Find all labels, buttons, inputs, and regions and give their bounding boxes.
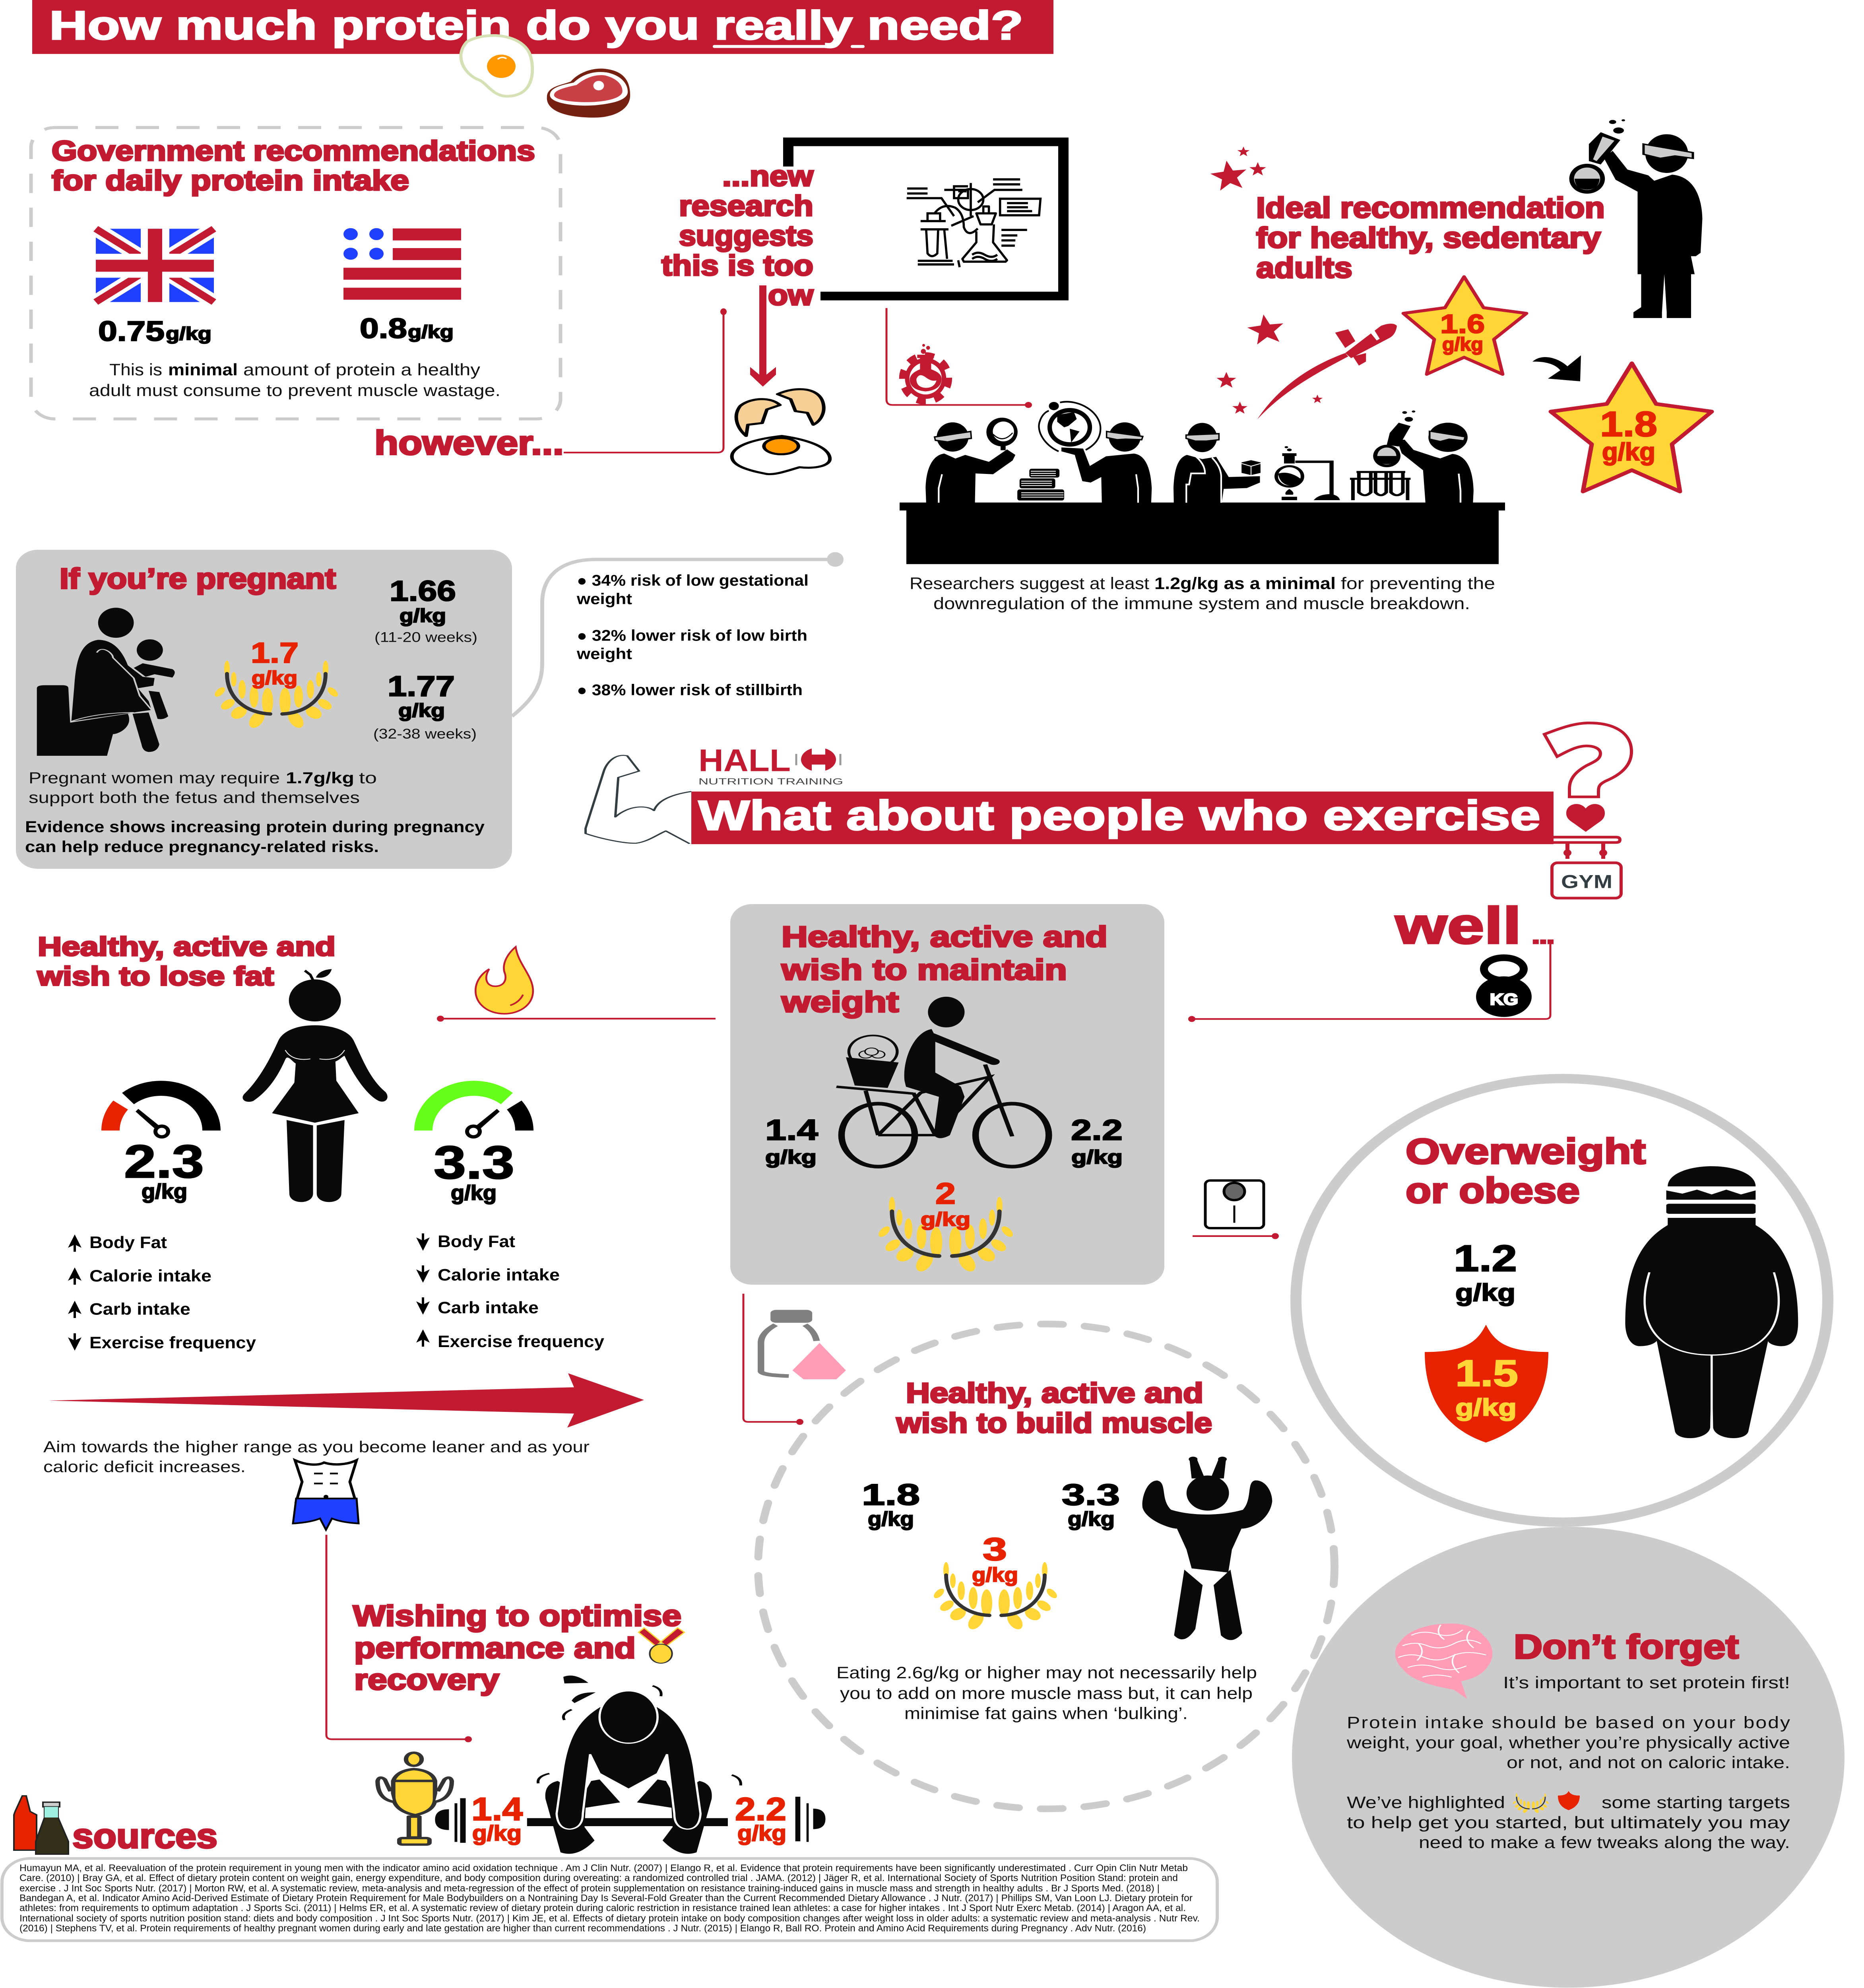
arrow: big red leaner direction (49, 1373, 644, 1427)
USA value: g/kg (408, 322, 454, 342)
heading: build muscle: Healthy, active and (906, 1378, 1203, 1409)
value: 2 g/kg with laurel: 2 (935, 1177, 956, 1210)
value: 1.4 g/kg (765, 1114, 818, 1168)
heading: build muscle (896, 1378, 1212, 1439)
heading: maintain weight: Healthy, active and (782, 921, 1108, 953)
panel: government recommendations (31, 128, 561, 419)
gauge: 2.3 g/kg: 2.3 (124, 1136, 204, 1188)
panel: pregnancy (16, 550, 512, 869)
icon: flask on stand (1276, 446, 1340, 500)
heading: government recommendations: for daily protein intake (52, 165, 409, 196)
heading: build muscle: wish to build muscle (896, 1408, 1212, 1439)
value: 1.4 g/kg: 1.4 (765, 1114, 818, 1146)
connector: however to egg (564, 309, 727, 452)
icon: burger-headed obese figure (1625, 1166, 1798, 1438)
text block: references: Care. (2010) | Bray GA, et al. Effect of dietary protein content on weight gain, energy expenditure, and body composition during overeating: a randomized controlled trial . JAMA. (2012) | Jäger R, et al. International Society of Sports Nutrition Position Stand: protein and (19, 1872, 1178, 1883)
research frame (788, 142, 1063, 296)
value: 1.77 g/kg (373, 670, 477, 742)
panel: build muscle (758, 1324, 1334, 1809)
text block: highlighted targets: to help get you started, but ultimately you may (1347, 1813, 1790, 1832)
list: high range effects: Exercise frequency (438, 1332, 604, 1351)
logo: Hall Nutrition Training: HALL (698, 744, 791, 778)
shield: 1.5 g/kg (1425, 1325, 1548, 1442)
value: 3 g/kg with laurel (932, 1531, 1059, 1631)
text block: references (19, 1862, 1200, 1934)
text block: minimal amount (89, 360, 500, 400)
icon: test tubes (1350, 472, 1410, 500)
value: 1.7 g/kg with laurel: g/kg (252, 667, 297, 688)
connector: research to scientists (886, 308, 1032, 408)
value: 1.4 g/kg performance: g/kg (472, 1821, 522, 1845)
value: 1.2 g/kg: 1.2 (1454, 1237, 1517, 1279)
list: high range effects: Carb intake (438, 1298, 539, 1317)
text block: pregnancy risk bullets: weight (576, 645, 632, 662)
star: 1.6 g/kg: g/kg (1442, 334, 1483, 355)
list: high range effects: Body Fat (438, 1232, 515, 1251)
text block: minimal amount: amount of protein a healthy (243, 360, 480, 379)
text block: researchers suggest: for preventing the (1341, 574, 1495, 593)
text block: highlighted targets (1347, 1791, 1790, 1852)
text block: protein intake: or not, and not on caloric intake. (1507, 1753, 1790, 1772)
list: high range effects: Calorie intake (438, 1265, 560, 1284)
icon: protein tub and powder (761, 1310, 846, 1379)
heading: new research (661, 160, 813, 311)
icon: gym sign: GYM (1561, 871, 1612, 892)
text block: eating 2.6g/kg: minimise fat gains when ‘bulking’. (904, 1704, 1188, 1722)
value: 1.7 g/kg with laurel (213, 637, 340, 730)
value: 1.2 g/kg: g/kg (1455, 1279, 1515, 1306)
UK value: 0.75 (98, 316, 165, 347)
icon: UK flag (96, 229, 214, 302)
heading: new research: suggests (679, 219, 813, 252)
gauge: 3.3 g/kg: g/kg (451, 1181, 497, 1204)
value: 1.66 g/kg: 1.66 (390, 575, 456, 607)
value: 1.7 g/kg with laurel: 1.7 (251, 637, 299, 669)
value: 3 g/kg with laurel: 3 (983, 1531, 1007, 1567)
icon: weightlifter with barbell (435, 1675, 825, 1854)
panel: maintain weight (730, 904, 1164, 1285)
value: 1.66 g/kg: (11-20 weeks) (374, 630, 477, 645)
UK value (98, 316, 211, 347)
lab bench (900, 503, 1505, 564)
list: low range effects: Calorie intake (89, 1266, 211, 1285)
value: 2.2 g/kg: 2.2 (1071, 1114, 1123, 1146)
heading: overweight or obese (1406, 1131, 1646, 1211)
heading: government recommendations (52, 136, 535, 196)
heading: new research: ...new (722, 160, 813, 192)
text block: references: International society of sports nutrition position stand: diets and body composition . J Int Soc Sports Nutr. (2017) | Kim JE, et al. Effects of dietary protein intake on body composition changes after weight loss in older adults: a systematic review and meta-analysis . Nutr Rev. (19, 1913, 1200, 1924)
connector: pregnancy benefits bracket (512, 552, 844, 716)
heading: wishing to optimise (353, 1600, 681, 1696)
icon: gear flask (903, 344, 948, 401)
icon: cracked egg (732, 389, 830, 474)
gauge: 2.3 g/kg (101, 1081, 221, 1203)
value: 2.2 g/kg performance (735, 1791, 786, 1845)
value: 2.2 g/kg performance: g/kg (737, 1821, 786, 1845)
icon: apple-headed woman (242, 969, 388, 1202)
value: 3 g/kg with laurel: g/kg (972, 1564, 1018, 1586)
value: 1.66 g/kg: g/kg (400, 605, 446, 626)
shield: 1.5 g/kg: g/kg (1455, 1394, 1517, 1421)
text block: evidence (25, 818, 485, 856)
icon: bathroom scale (1205, 1180, 1264, 1228)
panel: overweight or obese (1296, 1079, 1828, 1522)
value: 3.3 g/kg (1062, 1478, 1120, 1530)
text block: pregnancy risk bullets: ● 34% risk of low gestational (577, 572, 809, 589)
text block: highlighted targets: some starting targets (1602, 1793, 1790, 1812)
text block: eating 2.6g/kg: you to add on more muscle mass but, it can help (840, 1684, 1253, 1703)
text block: references: (2016) | Stephens TV, et al. Protein requirements of healthy pregnant women during early and late gestation are higher than current recommendations . J Nutr. (2015) | Elango R, Ball RO. Protein and Amino Acid Requirements during Pregnancy . Adv Nutr. (2016) (19, 1923, 1146, 1934)
value: 2 g/kg with laurel: g/kg (921, 1209, 970, 1230)
arrow: curved black (1532, 355, 1581, 381)
value: 1.4 g/kg performance: 1.4 (471, 1791, 523, 1827)
text block: aim towards: caloric deficit increases. (43, 1458, 246, 1476)
text block: eating 2.6g/kg: Eating 2.6g/kg or higher may not necessarily help (836, 1663, 1257, 1682)
icon: sauce bottles (14, 1796, 68, 1854)
UK value: g/kg (166, 323, 211, 344)
list: high range effects (416, 1232, 604, 1351)
text block: pregnant women: to (359, 769, 377, 787)
text block: minimal amount: minimal (168, 360, 238, 379)
USA value (360, 313, 454, 344)
heading: ideal recommendation: for healthy, sedentary (1256, 222, 1601, 254)
heading: however: however... (374, 424, 564, 462)
star: 1.6 g/kg (1403, 277, 1527, 374)
text block: pregnant women: support both the fetus and themselves (29, 789, 360, 806)
text block: references: exercise . J Int Soc Sports Nutr. (2017) | Morton RW, et al. A systematic review, meta-analysis and meta-regression of the effect of protein supplementation on resistance training-induced gains in muscle mass and strength in healthy adults . Br J Sports Med. (2018) | (19, 1883, 1160, 1894)
text block: pregnant women: 1.7g/kg (286, 769, 354, 787)
heading: don't forget: Don’t forget (1514, 1628, 1739, 1666)
heading: government recommendations: Government recommendations (52, 136, 535, 167)
heading: lose fat: wish to lose fat (37, 961, 274, 991)
icon: globe (1039, 402, 1100, 451)
value: 1.8 g/kg: g/kg (868, 1508, 914, 1530)
heading: if you're pregnant: If you’re pregnant (60, 563, 336, 594)
text block: protein intake (1346, 1713, 1790, 1772)
text block: minimal amount: adult must consume to prevent muscle wastage. (89, 381, 500, 400)
value: 2 g/kg with laurel (877, 1177, 1015, 1274)
heading: wishing to optimise: Wishing to optimise (353, 1600, 681, 1632)
banner: what about people who exercise: What about people who exercise (698, 792, 1540, 839)
text block: researchers suggest: 1.2g/kg as a minimal (1154, 574, 1336, 593)
text block: protein intake: Protein intake should be based on your body (1347, 1713, 1790, 1732)
icon: pregnant mother and child (37, 608, 175, 756)
text block: pregnant women (29, 769, 377, 806)
heading: well: ... (1532, 925, 1554, 948)
arrow: down to egg (750, 285, 776, 386)
icon: USA flag (343, 228, 461, 300)
connector: maintain to muscle (743, 1294, 803, 1425)
lab bench with scientists (900, 402, 1505, 564)
heading: overweight or obese: Overweight (1406, 1131, 1646, 1171)
text block: aim towards (43, 1438, 590, 1476)
gauge: 3.3 g/kg (414, 1081, 533, 1204)
value: 1.2 g/kg (1454, 1237, 1517, 1306)
scientist with cube (1173, 423, 1261, 503)
heading: wishing to optimise: performance and (354, 1632, 636, 1664)
text block: evidence: can help reduce pregnancy-related risks. (25, 838, 379, 856)
text block: researchers suggest (910, 574, 1495, 613)
value: 1.4 g/kg: g/kg (765, 1147, 817, 1168)
icon: lab sketch (907, 179, 1040, 267)
star: 1.8 g/kg (1551, 363, 1712, 491)
value: 1.8 g/kg (862, 1478, 920, 1530)
heading: lose fat (37, 932, 336, 991)
panel: don't forget (1292, 1527, 1845, 1988)
icon: heart (1566, 804, 1605, 832)
text block: pregnancy risk bullets: ● 32% lower risk of low birth (577, 627, 807, 644)
value: 3.3 g/kg: 3.3 (1062, 1478, 1120, 1511)
text block: references: Bandegan A, et al. Indicator Amino Acid-Derived Estimate of Dietary Protein Requirement for Male Bodybuilders on a Nontraining Day Is Several-Fold Greater than the Current Recommended Dietary Allowance . J Nutr. (2017) | Phillips SM, Van Loon LJ. Dietary protein for (19, 1893, 1193, 1903)
text block: evidence: Evidence shows increasing protein during pregnancy (25, 818, 485, 836)
heading: new research: this is too (661, 249, 813, 282)
heading: ideal recommendation: Ideal recommendation (1256, 192, 1605, 224)
icon: question mark (1544, 723, 1631, 797)
USA value: 0.8 (360, 313, 407, 344)
connector: scale (1193, 1233, 1279, 1239)
star: 1.6 g/kg: 1.6 (1440, 309, 1485, 339)
icon: medal (638, 1628, 684, 1663)
list: low range effects (68, 1233, 256, 1352)
text block: set protein first: It’s important to set protein first! (1503, 1673, 1790, 1692)
icon: cyclist with basket (836, 997, 1049, 1167)
panel: sources references (2, 1858, 1217, 1941)
list: low range effects: Exercise frequency (89, 1333, 256, 1352)
icon: kettlebell: KG (1490, 990, 1518, 1008)
heading: maintain weight (781, 921, 1108, 1019)
heading: new research: ow (768, 279, 813, 311)
text block: aim towards: Aim towards the higher range as you become leaner and as your (43, 1438, 590, 1456)
icon: gym sign (1552, 836, 1622, 898)
star: 1.8 g/kg: g/kg (1602, 438, 1655, 466)
icon: abs torso in shorts (293, 1460, 359, 1530)
list: low range effects: Carb intake (89, 1299, 190, 1318)
icon: rocket (1257, 324, 1397, 419)
text block: references: athletes: from requirements to optimum adaptation . J Sports Sci. (2011) | Helms ER, et al. A systematic review of dietary protein during caloric restriction in resistance trained lean athletes: a case for higher intakes . Int J Sport Nutr Exerc Metab. (2014) | Aragon AA, et al. (19, 1903, 1186, 1913)
icon: fried egg (461, 35, 532, 96)
barbell (435, 1797, 825, 1843)
text block: pregnancy risk bullets (576, 572, 809, 699)
text block: researchers suggest: Researchers suggest at least (910, 574, 1149, 593)
text block: pregnancy risk bullets: ● 38% lower risk of stillbirth (577, 681, 803, 699)
gauge: 2.3 g/kg: g/kg (142, 1180, 187, 1203)
heading: new research: research (679, 190, 813, 222)
connector: well to maintain (1188, 942, 1550, 1022)
title banner: How much protein do you really need? (49, 2, 1023, 48)
heading: ideal recommendation: adults (1256, 252, 1352, 284)
text block: references: Humayun MA, et al. Reevaluation of the protein requirement in young men with the indicator amino acid oxidation technique . Am J Clin Nutr. (2007) | Elango R, et al. Evidence that protein requirements have been significantly underestimated . Curr Opin Clin Nutr Metab (19, 1862, 1188, 1873)
text block: minimal amount: This is (109, 360, 162, 379)
text block: pregnancy risk bullets: weight (576, 590, 632, 607)
scientist with magnifier (925, 417, 1018, 503)
icon: kettlebell (1476, 958, 1532, 1017)
text block: protein intake: weight, your goal, whether you’re physically active (1346, 1733, 1790, 1752)
gauge: 3.3 g/kg: 3.3 (434, 1137, 514, 1188)
text block: eating 2.6g/kg (836, 1663, 1257, 1722)
value: 1.77 g/kg: g/kg (398, 700, 445, 721)
heading: ideal recommendation (1256, 192, 1605, 284)
logo: Hall Nutrition Training: NUTRITION TRAINING (698, 777, 843, 787)
stars (1208, 147, 1323, 414)
lifter figure (545, 1691, 712, 1854)
heading: wishing to optimise: recovery (354, 1664, 499, 1696)
heading: maintain weight: weight (781, 986, 899, 1019)
icon: trophy (378, 1753, 452, 1844)
logo: Hall Nutrition Training (698, 744, 843, 787)
icon: flexed arm (586, 755, 691, 844)
icon: brain (1395, 1623, 1492, 1699)
icon: tall scientist with flask (1569, 119, 1702, 318)
value: 2.2 g/kg performance: 2.2 (735, 1791, 786, 1827)
heading: lose fat: Healthy, active and (38, 932, 336, 961)
value: 1.8 g/kg: 1.8 (862, 1478, 920, 1511)
icon: flame (475, 947, 533, 1014)
shield: 1.5 g/kg: 1.5 (1455, 1352, 1518, 1394)
text block: highlighted targets: need to make a few tweaks along the way. (1419, 1833, 1790, 1852)
icon: steak (547, 69, 630, 118)
heading: sources: sources (72, 1817, 217, 1855)
list: low range effects: Body Fat (89, 1233, 167, 1252)
heading: overweight or obese: or obese (1406, 1171, 1580, 1211)
value: 1.77 g/kg: 1.77 (388, 670, 455, 702)
value: 1.66 g/kg (374, 575, 477, 645)
text block: highlighted targets: We’ve highlighted (1347, 1793, 1505, 1812)
heading: well: well (1395, 897, 1521, 955)
heading: maintain weight: wish to maintain (781, 954, 1067, 986)
star: 1.8 g/kg: 1.8 (1600, 404, 1657, 444)
icon: books (1017, 469, 1064, 501)
value: 3.3 g/kg: g/kg (1068, 1508, 1115, 1530)
value: 2.2 g/kg: g/kg (1071, 1147, 1123, 1168)
text block: pregnant women: Pregnant women may require (29, 769, 280, 787)
value: 1.4 g/kg performance (471, 1791, 523, 1845)
icon: chicken-headed muscle man (1142, 1457, 1272, 1640)
connector: to optimise performance (326, 1535, 472, 1742)
scientist with globe (1061, 422, 1152, 503)
text block: researchers suggest: downregulation of the immune system and muscle breakdown. (933, 594, 1470, 613)
value: 1.77 g/kg: (32-38 weeks) (373, 726, 477, 742)
value: 2.2 g/kg (1071, 1114, 1123, 1168)
connector: flame line (437, 1015, 716, 1022)
scientist with flask (1373, 410, 1474, 503)
